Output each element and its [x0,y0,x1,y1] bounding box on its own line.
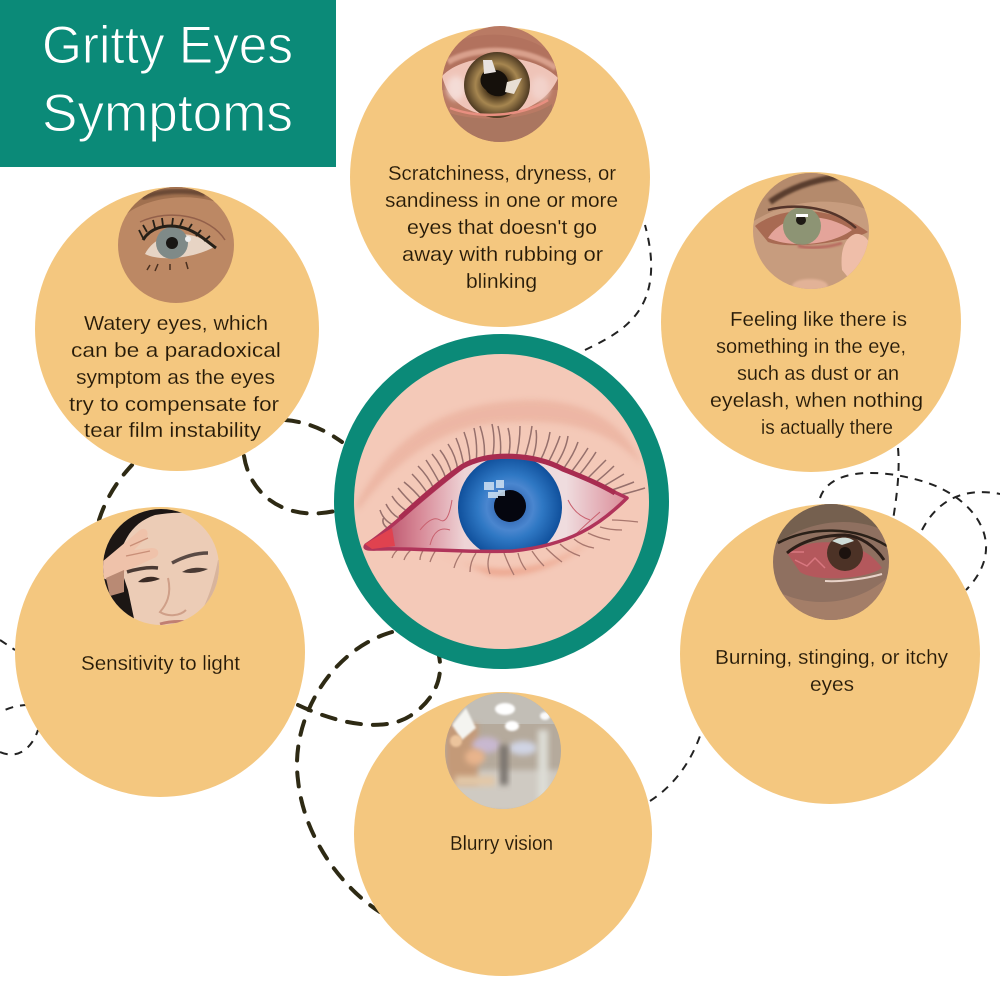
title: Gritty Eyes [42,16,293,75]
panel: scratchiness [350,24,650,327]
text: Feeling like there is [730,309,907,331]
panel: blurry vision [354,690,652,976]
dashed connector: bottom arcs [297,632,440,912]
text: eyes that doesn't go [407,217,597,239]
dashed connector: left loop [99,420,342,520]
text [715,647,948,696]
text: away with rubbing or [402,244,603,266]
lower lid shadow [472,546,581,578]
dashed connector: top to right [585,225,651,350]
text [385,163,618,293]
text: eyes [810,674,854,696]
text: Sensitivity to light [81,653,240,675]
photo: woman squinting [100,506,222,628]
eyelid rim [365,457,627,551]
header banner [0,0,336,167]
photo: watery grey eye [116,185,236,305]
ring [344,344,659,659]
lower lashes [392,520,638,575]
panel: watery eyes [35,185,319,471]
text: such as dust or an [737,363,899,385]
eyelid crease [356,400,642,510]
text: tear film instability [84,420,261,442]
dashed connector: lower right to bottom [650,733,701,801]
panel: sensitivity to light [15,506,305,797]
text [710,309,923,439]
title: Symptoms [42,84,293,143]
photo: irritated brown eye [440,24,560,144]
dashed connector: left edge [0,640,38,755]
text: is actually there [761,417,893,439]
text: Blurry vision [450,833,553,855]
title [42,16,293,143]
inner corner [365,528,395,549]
text: eyelash, when nothing [710,390,923,412]
upper lashes [380,424,645,530]
dashed connector: right loops [820,448,1000,590]
text: sandiness in one or more [385,190,618,212]
eye white, iris and vessels [367,458,624,550]
photo: bloodshot dark eye [770,502,892,624]
text: blinking [466,271,537,293]
text: Scratchiness, dryness, or [388,163,616,185]
text: Burning, stinging, or itchy [715,647,948,669]
photo: red eye with finger [753,173,869,289]
centre eye illustration [344,344,659,659]
text [69,313,281,442]
text: symptom as the eyes [76,367,275,389]
text: Watery eyes, which [84,313,268,335]
panel: foreign body feeling [661,170,961,472]
text: try to compensate for [69,394,279,416]
panel: burning, stinging [680,502,980,804]
text: something in the eye, [716,336,906,358]
photo: blurred shopping mall [442,690,564,812]
text: can be a paradoxical [71,340,281,362]
